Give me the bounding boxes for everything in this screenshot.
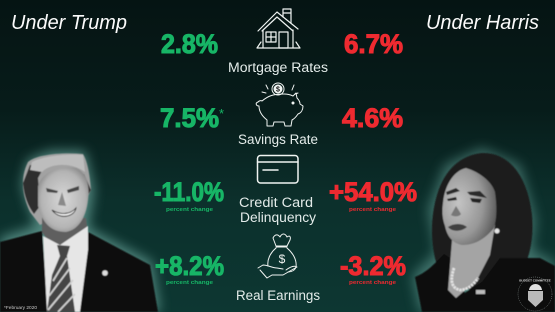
label: Credit Card Delinquency: Credit Card	[239, 195, 313, 210]
title: Under Harris: Under Harris	[426, 12, 539, 34]
label: Savings Rate: Savings Rate	[238, 132, 318, 147]
seal: Budget Committee	[518, 277, 552, 311]
footnote: *February 2020	[4, 305, 37, 311]
pin	[476, 290, 485, 294]
icon: credit card	[258, 156, 298, 183]
row: real earnings	[155, 234, 406, 303]
necklace	[452, 268, 478, 290]
icon: piggy bank	[256, 83, 303, 126]
value: Trump credit card delinquency: -11.0%	[154, 177, 224, 207]
label: Mortgage Rates: Mortgage Rates	[228, 60, 328, 75]
face	[442, 168, 496, 245]
jacket	[415, 254, 470, 312]
photo: Trump	[0, 151, 160, 312]
face	[38, 167, 88, 232]
value: Harris savings rate: 4.6%	[342, 103, 403, 133]
value: Harris real earnings: -3.2%	[340, 251, 406, 281]
label: Real Earnings: Real Earnings	[236, 288, 320, 303]
row: savings rate	[160, 83, 403, 147]
caption: percent change	[166, 207, 213, 213]
suit	[0, 231, 48, 312]
hair	[432, 153, 532, 290]
neck	[448, 225, 495, 298]
tie	[47, 245, 75, 312]
seal: Budget Committee: BUDGET COMMITTEE	[519, 278, 551, 282]
value: Harris mortgage rate: 6.7%	[344, 29, 403, 59]
row: credit card delinquency	[154, 156, 417, 225]
value: Trump savings rate: 7.5%	[160, 103, 219, 133]
pin	[102, 270, 108, 276]
asterisk: *	[219, 106, 224, 121]
title: Under Trump: Under Trump	[11, 12, 127, 34]
value: Harris credit card delinquency: +54.0%	[329, 177, 417, 207]
caption: percent change	[166, 280, 213, 286]
value: Trump mortgage rate: 2.8%	[161, 29, 218, 59]
icon: money bag in hand: $	[279, 252, 286, 266]
icon: piggy bank: $	[276, 86, 280, 94]
neck	[42, 215, 88, 246]
row: mortgage rates	[161, 9, 403, 75]
label: Credit Card Delinquency: Delinquency	[240, 210, 316, 225]
caption: percent change	[349, 280, 396, 286]
value: Trump real earnings: +8.2%	[155, 251, 224, 281]
icon: house	[257, 9, 300, 48]
label: Credit Card Delinquency	[239, 195, 316, 225]
caption: percent change	[349, 207, 396, 213]
earring	[494, 228, 500, 234]
shirt	[43, 226, 88, 312]
photo: Harris	[412, 148, 555, 312]
hair	[23, 153, 91, 225]
icon: money bag in hand	[258, 234, 297, 278]
